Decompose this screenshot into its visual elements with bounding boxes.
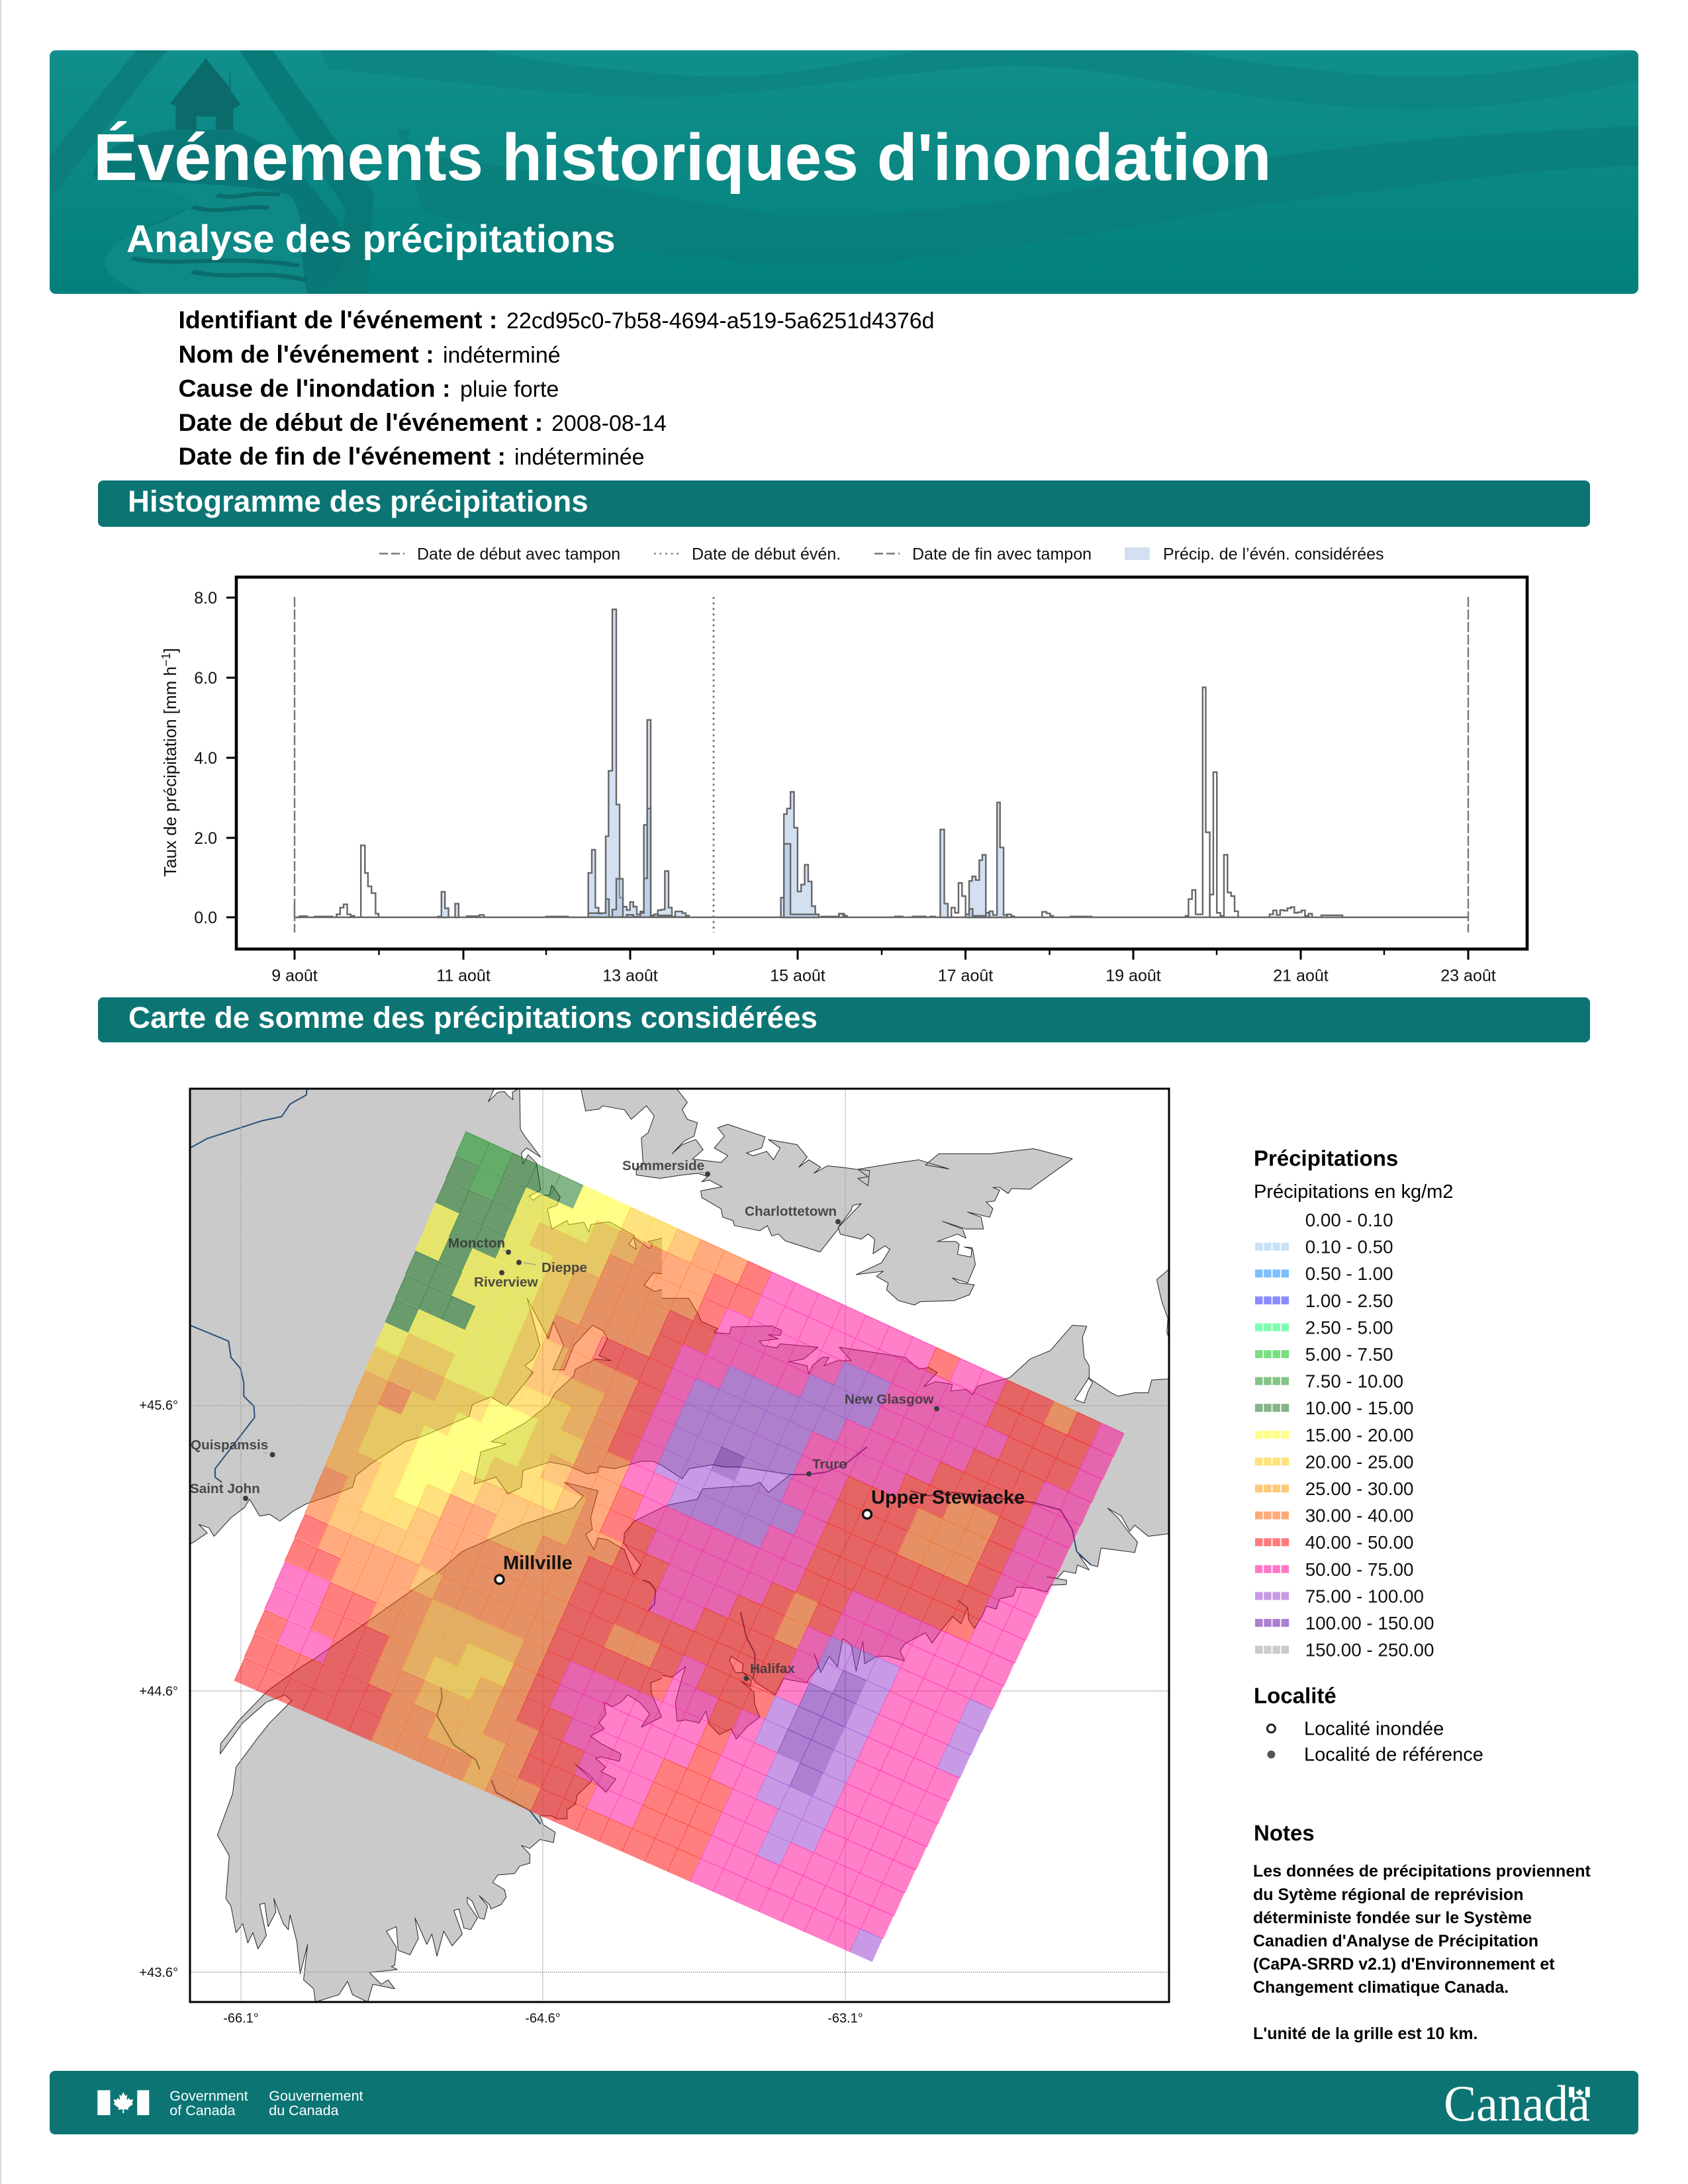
reference localities: Riverview <box>474 1275 539 1290</box>
reference localities: Halifax <box>750 1661 795 1676</box>
panel: footer <box>50 2071 1638 2134</box>
panel: header banner <box>50 38 1642 294</box>
reference localities: Summerside <box>622 1158 704 1173</box>
chart legend <box>379 545 1384 564</box>
land masses <box>185 1079 1176 2002</box>
government of Canada wordmark: Gouvernement <box>269 2088 363 2104</box>
panel: locality legend <box>1254 1684 1483 1766</box>
precipitation grid cells <box>234 1131 1125 1962</box>
x axis ticks and labels: 19 août <box>1105 966 1161 985</box>
flood cause: pluie forte <box>460 377 559 402</box>
flood cause: Cause de l'inondation : <box>179 375 451 402</box>
notes text: Canadien d'Analyse de Précipitation <box>1253 1932 1538 1950</box>
flooded locality: Millville: Millville <box>503 1553 573 1574</box>
x axis ticks and labels: 13 août <box>602 966 658 985</box>
icon: flood logo watermark <box>50 50 373 294</box>
reference localities: Moncton <box>448 1236 505 1251</box>
start date: 2008-08-14 <box>551 411 667 436</box>
locality heading: Localité <box>1254 1684 1336 1707</box>
legend class labels: 1.00 - 2.50 <box>1305 1291 1393 1311</box>
legend class labels: 5.00 - 7.50 <box>1305 1344 1393 1365</box>
event name: indéterminé <box>443 343 561 368</box>
map axis labels: +43.6° <box>139 1966 178 1980</box>
reference localities: Truro <box>812 1457 847 1472</box>
legend swatches <box>1255 1247 1289 1650</box>
legend class labels: 0.50 - 1.00 <box>1305 1263 1393 1284</box>
y axis title: −1 <box>160 653 173 666</box>
legend class labels <box>1305 1210 1434 1661</box>
government of Canada wordmark: du Canada <box>269 2103 339 2118</box>
title: Événements historiques d'inondation <box>93 120 1272 195</box>
start date: Date de début de l'événement : <box>179 408 543 436</box>
map frame <box>190 1089 1169 2002</box>
precipitation step series <box>295 610 1468 917</box>
icon: flooded locality marker <box>1267 1725 1275 1733</box>
government of Canada wordmark: Government <box>169 2088 248 2104</box>
heading: map section <box>98 997 1590 1042</box>
panel: precipitation legend <box>1254 1146 1453 1661</box>
x axis ticks and labels: 15 août <box>770 966 825 985</box>
event identifier: 22cd95c0-7b58-4694-a519-5a6251d4376d <box>506 308 935 334</box>
event name: Nom de l'événement : <box>179 340 434 368</box>
reference locality label: Localité de référence <box>1304 1745 1483 1766</box>
reference localities: Dieppe <box>541 1260 587 1275</box>
x axis ticks and labels: 23 août <box>1440 966 1496 985</box>
flooded locality label: Localité inondée <box>1304 1718 1444 1739</box>
legend class labels: 25.00 - 30.00 <box>1305 1479 1414 1499</box>
legend class labels: 20.00 - 25.00 <box>1305 1451 1414 1472</box>
notes text: du Sytème régional de reprévision <box>1253 1886 1523 1904</box>
chart legend: Date de début évén. <box>692 545 841 564</box>
end date: Date de fin de l'événement : <box>179 442 506 470</box>
chart legend: Précip. de l’évén. considérées <box>1163 545 1384 564</box>
y axis ticks and labels <box>194 589 236 927</box>
legend class labels: 7.50 - 10.00 <box>1305 1371 1403 1392</box>
y axis ticks and labels: 0.0 <box>194 909 217 927</box>
map axis labels: +44.6° <box>139 1684 178 1699</box>
map axis labels <box>139 1398 863 2026</box>
y axis ticks and labels: 6.0 <box>194 669 217 688</box>
notes heading: Notes <box>1254 1821 1315 1845</box>
icon: reference locality marker <box>1267 1751 1275 1758</box>
legend class labels: 0.10 - 0.50 <box>1305 1237 1393 1257</box>
graticule <box>191 1089 1168 2001</box>
flooded locality: Millville <box>495 1553 573 1584</box>
x axis ticks and labels: 21 août <box>1273 966 1329 985</box>
legend class labels: 10.00 - 15.00 <box>1305 1398 1414 1418</box>
y axis ticks and labels: 4.0 <box>194 749 217 768</box>
land: Prince Edward Island <box>581 1087 1072 1305</box>
notes text: déterministe fondée sur le Système <box>1253 1909 1532 1927</box>
x axis ticks and labels <box>271 949 1496 985</box>
legend subtitle: Précipitations en kg/m2 <box>1254 1181 1453 1203</box>
event identifier: Identifiant de l'événement : <box>179 306 497 334</box>
legend class labels: 75.00 - 100.00 <box>1305 1586 1424 1606</box>
subtitle: Analyse des précipitations <box>126 218 616 261</box>
buffered start date line <box>294 597 295 933</box>
reference localities <box>190 1158 939 1681</box>
legend class labels: 2.50 - 5.00 <box>1305 1317 1393 1338</box>
x axis ticks and labels: 17 août <box>938 966 993 985</box>
panel: event information <box>179 306 935 470</box>
x axis ticks and labels: 9 août <box>271 966 318 985</box>
y axis title: Taux de précipitation [mm h <box>160 666 180 877</box>
notes text: (CaPA-SRRD v2.1) d'Environnement et <box>1253 1955 1555 1974</box>
map axis labels: -63.1° <box>827 2011 863 2026</box>
legend class labels: 40.00 - 50.00 <box>1305 1532 1414 1553</box>
heading: histogram section <box>98 480 1590 527</box>
panel: precipitation map <box>139 1079 1176 2026</box>
notes text: L'unité de la grille est 10 km. <box>1253 2025 1477 2043</box>
legend class labels: 0.00 - 0.10 <box>1305 1210 1393 1230</box>
reference localities: Quispamsis <box>191 1437 268 1453</box>
chart legend: Date de début avec tampon <box>417 545 620 564</box>
chart legend: Date de fin avec tampon <box>912 545 1092 564</box>
flooded locality: Upper Stewiacke: Upper Stewiacke <box>871 1487 1025 1508</box>
y axis ticks and labels: 8.0 <box>194 589 217 608</box>
panel: notes <box>1253 1821 1591 2043</box>
icon: Canadian flag signature <box>97 2090 149 2115</box>
y axis ticks and labels: 2.0 <box>194 829 217 848</box>
x axis ticks and labels: 11 août <box>436 966 491 985</box>
government of Canada wordmark <box>169 2088 363 2118</box>
map axis labels: -66.1° <box>223 2011 259 2026</box>
event start date line <box>713 597 714 933</box>
legend class labels: 30.00 - 40.00 <box>1305 1506 1414 1526</box>
rivers <box>190 1089 1091 1824</box>
legend class labels: 15.00 - 20.00 <box>1305 1425 1414 1445</box>
end date: indéterminée <box>514 445 645 470</box>
notes text <box>1253 1862 1591 2043</box>
reference localities: Charlottetown <box>745 1204 837 1219</box>
y axis title: ] <box>160 648 180 653</box>
heading: histogram section: Histogramme des précipitations <box>128 484 588 518</box>
legend class labels: 100.00 - 150.00 <box>1305 1613 1434 1633</box>
heading: map section: Carte de somme des précipitations considérées <box>128 1001 818 1034</box>
notes text: Les données de précipitations proviennent <box>1253 1862 1591 1881</box>
legend class labels: 50.00 - 75.00 <box>1305 1559 1414 1580</box>
legend heading: Précipitations <box>1254 1146 1398 1170</box>
legend class labels: 150.00 - 250.00 <box>1305 1640 1434 1661</box>
flooded locality: Upper Stewiacke <box>863 1487 1025 1518</box>
bar chart: precipitation histogram <box>160 577 1527 985</box>
map axis labels: +45.6° <box>139 1398 178 1413</box>
reference localities: Saint John <box>190 1481 260 1496</box>
reference localities: New Glasgow <box>845 1392 934 1407</box>
Canada wordmark: Canada <box>1444 2075 1590 2132</box>
buffered end date line <box>1468 597 1469 933</box>
map axis labels: -64.6° <box>525 2011 561 2026</box>
notes text: Changement climatique Canada. <box>1253 1978 1509 1997</box>
government of Canada wordmark: of Canada <box>169 2103 236 2118</box>
